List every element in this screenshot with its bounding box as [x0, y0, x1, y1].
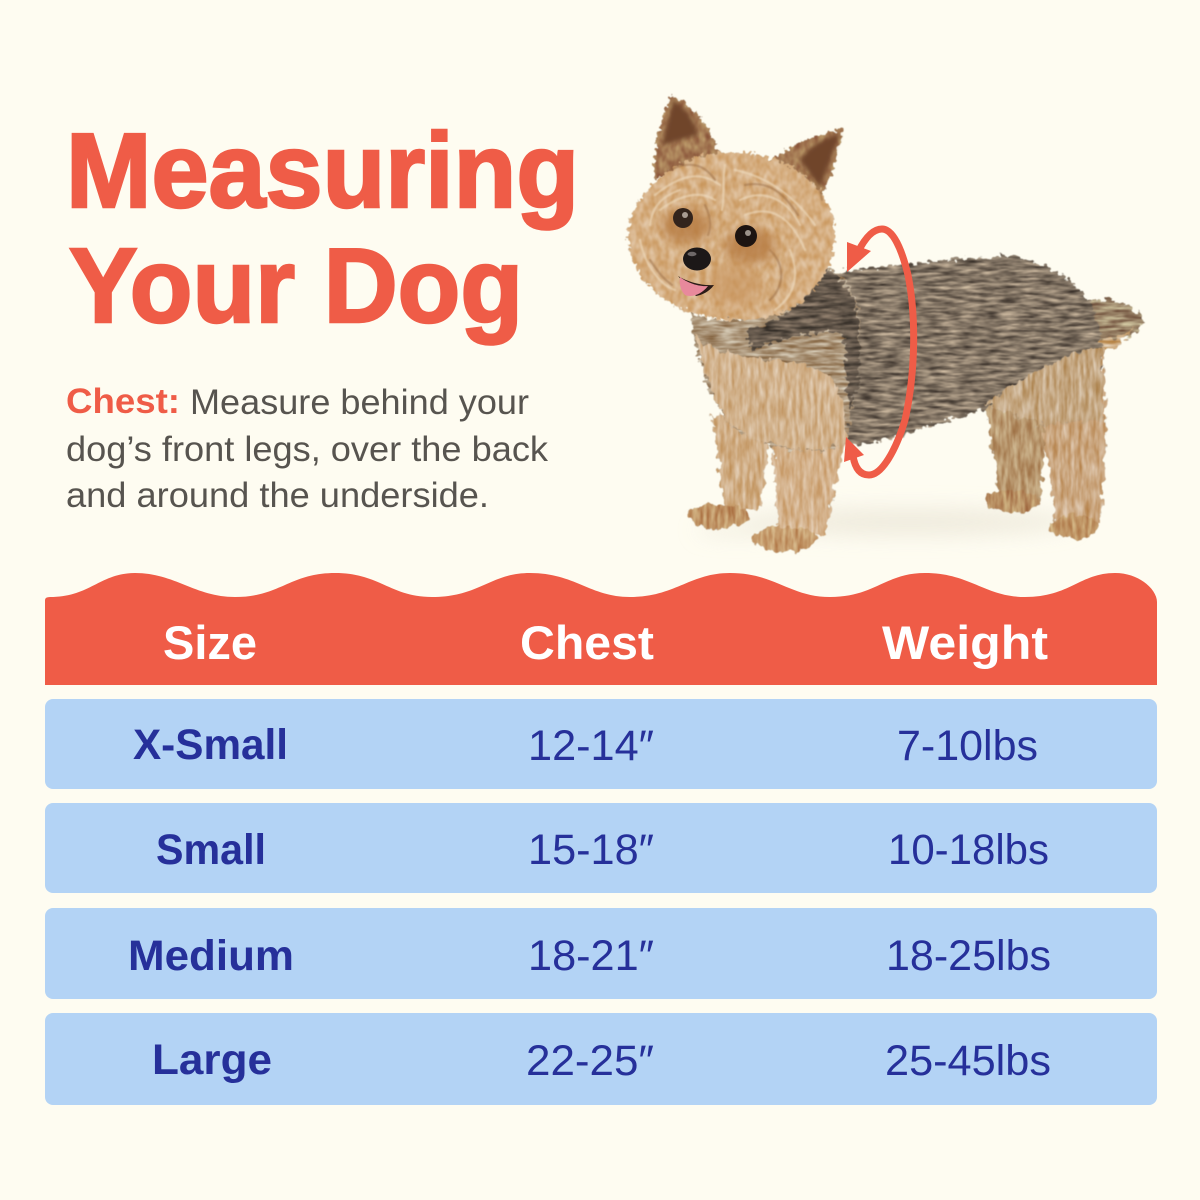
- row: Medium: Medium: [128, 932, 294, 980]
- row: Small: [45, 803, 1157, 893]
- row: Large: [45, 1013, 1157, 1105]
- row: Large: Large: [152, 1036, 272, 1084]
- dog ear inner: [662, 100, 840, 188]
- dog face: [662, 208, 775, 307]
- dog hindquarter tan: [985, 345, 1104, 425]
- dog photo illustration: [628, 95, 1143, 552]
- row: Small: 15-18″: [528, 826, 654, 874]
- size chart table: [45, 573, 1157, 1105]
- title: Your Dog: [69, 227, 523, 345]
- dog body: [800, 256, 1101, 444]
- dog lower chest tan: [695, 335, 847, 450]
- row: Small: 10-18lbs: [888, 826, 1049, 874]
- table header with wavy top: Weight: [882, 616, 1048, 669]
- dog ears: [654, 95, 843, 198]
- chest measuring instructions: dog’s front legs, over the back: [66, 430, 549, 469]
- row: Medium: [45, 908, 1157, 999]
- title: [66, 112, 579, 345]
- head fur streaks: [640, 165, 822, 310]
- row: X-Small: X-Small: [133, 721, 288, 769]
- dog front legs: [688, 415, 848, 552]
- chest measuring instructions: Measure behind your: [190, 383, 529, 422]
- row: Large: 22-25″: [526, 1037, 654, 1085]
- measuring arrow: [844, 229, 914, 475]
- table header with wavy top: Chest: [520, 616, 654, 669]
- row: Small: Small: [156, 826, 266, 874]
- table header with wavy top: [45, 573, 1157, 688]
- row: Large: 25-45lbs: [885, 1037, 1051, 1085]
- table header with wavy top: Size: [163, 616, 257, 669]
- chest measuring instructions: and around the underside.: [66, 476, 489, 515]
- dog head: [628, 152, 835, 320]
- title: Measuring: [66, 112, 579, 230]
- row: X-Small: 7-10lbs: [897, 722, 1038, 770]
- row: X-Small: 12-14″: [528, 722, 654, 770]
- chest measuring instructions: Chest:: [66, 382, 180, 421]
- row: Medium: 18-21″: [528, 932, 654, 980]
- dog chest and shoulder: [690, 262, 860, 450]
- row: Medium: 18-25lbs: [886, 932, 1051, 980]
- dog tail: [1082, 299, 1143, 352]
- chest measuring instructions: [66, 382, 549, 515]
- row: X-Small: [45, 699, 1157, 789]
- dog rear legs: [985, 345, 1106, 539]
- dog dark collar and harness shading: [745, 265, 860, 410]
- ground shadow: [695, 509, 1075, 535]
